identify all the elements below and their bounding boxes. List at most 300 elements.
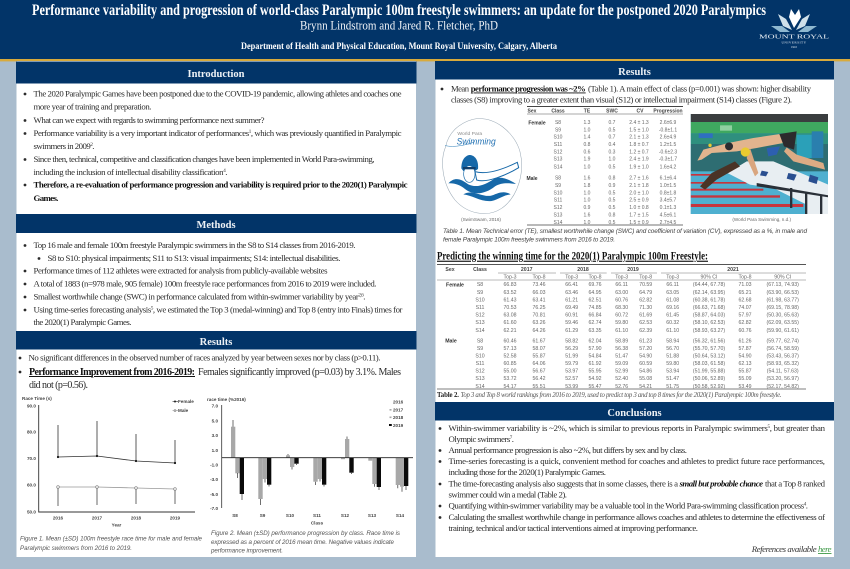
text block: methods bullets: Smallest worthwhile change (SWC) in performance calculated from within-swimmer variability by year — [34, 292, 359, 302]
panel: left column — [16, 61, 416, 557]
table 2: (64.44, 67.78) — [693, 282, 725, 288]
table 2: 61.23 — [639, 339, 652, 345]
table 2: (62.14, 63.95) — [693, 290, 725, 296]
table 2: 60.85 — [504, 361, 517, 367]
text block: results bullets: Performance Improvement from 2016-2019: — [29, 367, 195, 378]
text block: introduction bullets: . — [225, 167, 228, 177]
text block: introduction bullets: Therefore, a re-evaluation of performance progression and variability is required prior to the 2020(1) Paralympic — [34, 180, 408, 190]
table 2: (58.10, 62.53) — [693, 320, 725, 326]
table 2: 61.21 — [565, 298, 578, 304]
table 2: 57.20 — [639, 346, 652, 352]
chart: figure 2 progression bar chart: S9 — [260, 513, 266, 518]
table 2: 62.68 — [739, 298, 752, 304]
table 1: 0.4 — [609, 142, 616, 148]
table 2: 54.17 — [504, 384, 517, 390]
text block: conclusions bullets: 4 — [804, 503, 807, 508]
table 2: 65.21 — [739, 290, 752, 296]
text block: methods bullets: 5 — [151, 306, 154, 312]
table 2: 57.13 — [504, 346, 517, 352]
chart: figure 1 race time line chart — [22, 396, 195, 528]
text block: progression summary: performance progression was ~2% — [471, 84, 586, 94]
table 2: 62.39 — [639, 328, 652, 334]
text block: methods bullets: the 2020(1) Paralympic Games. — [34, 317, 132, 327]
table 2: (54.11, 57.63) — [767, 369, 799, 375]
table 2: 66.83 — [504, 282, 517, 288]
table 1: 1.2±1.5 — [660, 142, 677, 148]
table 2: 53.72 — [504, 376, 517, 382]
chart: figure 1 race time line chart: 50.0 — [27, 510, 36, 514]
table 1: 2.7±4.5 — [660, 220, 677, 226]
table 2: 66.84 — [589, 313, 602, 319]
table 2: S14 — [475, 328, 485, 334]
table 2: 60.32 — [666, 320, 679, 326]
table 2: 52.40 — [615, 376, 628, 382]
table 2: (51.99, 55.88) — [693, 369, 725, 375]
table 2: 62.51 — [589, 298, 602, 304]
table 2: 61.69 — [639, 313, 652, 319]
table 2: 62.74 — [589, 320, 602, 326]
text block: conclusions bullets: . — [512, 434, 514, 444]
table 2: 71.30 — [639, 305, 652, 311]
table 1: S14 — [554, 164, 563, 170]
table 2: 55.51 — [533, 384, 546, 390]
table 2: (53.43, 56.37) — [767, 354, 799, 360]
table 1: S12 — [554, 205, 563, 211]
table 1: 1.0 ± 0.8 — [629, 205, 649, 211]
table 2: (62.09, 63.55) — [767, 320, 799, 326]
table 1: S10 — [554, 135, 563, 141]
table 2: 2017 — [521, 267, 533, 273]
table 2: 55.00 — [504, 369, 517, 375]
chart: figure 2 progression bar chart: -7.0 — [210, 506, 218, 511]
table 2: 52.57 — [565, 376, 578, 382]
text block: conclusions bullets: 5 — [768, 425, 771, 430]
table 2: 62.13 — [739, 361, 752, 367]
table 2: 58.07 — [533, 346, 546, 352]
table 1: Progression — [653, 108, 683, 114]
table 2: 62.53 — [639, 320, 652, 326]
table 1: -0.3±1.7 — [659, 157, 677, 163]
table 1: S11 — [554, 198, 562, 204]
table 1: 0.7 — [609, 120, 616, 126]
text block: introduction bullets: What can we expect with regards to swimming performance next summer? — [34, 115, 265, 125]
table 2: 60.76 — [615, 298, 628, 304]
text block: methods bullets: S8 to S10: physical impairments; S11 to S13: visual impairments; S14: intellectual disabilities. — [48, 253, 340, 263]
heading: Methods: Methods — [196, 220, 236, 231]
table 2: 68.30 — [615, 305, 628, 311]
table 2: 60.46 — [504, 339, 517, 345]
table 2: (67.13, 74.93) — [767, 282, 799, 288]
table 1: 0.9 — [584, 205, 591, 211]
text block: results bullets: No significant differences in the observed number of races analyzed by year between sexes nor by class (p>0.11). — [28, 352, 380, 362]
table 2: Top-3 — [666, 274, 679, 280]
table 2: S11 — [476, 305, 485, 311]
chart: figure 2 progression bar chart: 2016 — [393, 400, 404, 404]
text block: conclusions bullets: Calculating the smallest worthwhile change in performance allows coaches and athletes to determine the effectiveness of — [448, 512, 825, 522]
chart: figure 2 progression bar chart: S14 — [396, 513, 405, 518]
table 1: 4.5±6.1 — [660, 212, 677, 218]
table 2: 56.70 — [666, 346, 679, 352]
table 2: 70.59 — [639, 282, 652, 288]
text block: conclusions bullets: training, technical and/or tactical interventions aimed at improving performance. — [448, 523, 698, 533]
table 2: 64.26 — [533, 328, 546, 334]
table 2: 61.10 — [615, 328, 628, 334]
table 1: 2.6±6.9 — [660, 120, 677, 126]
table 2: 63.08 — [504, 313, 517, 319]
text block: introduction bullets: Games. — [34, 193, 58, 203]
chart: figure 2 progression bar chart: Class — [311, 520, 324, 526]
table 2: 70.81 — [533, 313, 546, 319]
table 2: (59.77, 62.74) — [767, 339, 799, 345]
table 2: 54.92 — [589, 376, 602, 382]
table 2: 55.87 — [739, 369, 752, 375]
table 2: 51.47 — [615, 354, 628, 360]
table 2: Male — [445, 339, 457, 345]
table 1: Male — [526, 176, 538, 182]
table 2: Top-8 — [639, 274, 652, 280]
table 2: 59.79 — [565, 361, 578, 367]
text block: conclusions bullets: swimmer could win a medal (Table 2). — [448, 490, 567, 500]
table 2: (58.93, 65.32) — [767, 361, 799, 367]
table 2: 64.79 — [639, 290, 652, 296]
table 1: Sex — [528, 108, 537, 114]
table 2: (52.17, 54.82) — [767, 384, 799, 390]
table 2: 69.76 — [589, 282, 602, 288]
table 2: 61.10 — [666, 328, 679, 334]
table 2: 54.90 — [739, 354, 752, 360]
table 1: 1.0 — [584, 190, 591, 196]
table 2: 54.84 — [589, 354, 602, 360]
table 2: 61.67 — [533, 339, 546, 345]
table 1: 1.5 ± 0.9 — [629, 220, 649, 226]
text block: progression summary: (Table 1). A main effect of class (p=0.001) was shown: higher disability — [588, 84, 812, 94]
table 2: (60.38, 61.78) — [693, 298, 725, 304]
table 2: 60.59 — [639, 361, 652, 367]
table 2: (55.70, 57.70) — [693, 346, 725, 352]
table 2: 2021 — [727, 267, 739, 273]
text block: introduction bullets: . — [92, 141, 94, 151]
table 2: (50.06, 52.89) — [693, 376, 725, 382]
table 1: 0.3 — [609, 149, 616, 155]
text block: introduction bullets: swimmers in 2009 — [34, 141, 91, 151]
table 2: 54.21 — [639, 384, 652, 390]
text block: progression summary: Mean — [451, 84, 470, 94]
logo: Mount Royal University: 1910 — [791, 45, 798, 49]
table 2: (58.03, 61.58) — [693, 361, 725, 367]
table 1: 2.4 ± 1.9 — [629, 157, 649, 163]
chart: figure 2 progression bar chart: S11 — [313, 513, 321, 518]
table 2: 52.76 — [615, 384, 628, 390]
table 1: S9 — [555, 183, 561, 189]
table 2: 55.87 — [533, 354, 546, 360]
chart: figure 1 race time line chart: 2016 — [53, 516, 64, 520]
image: swimmers diving from starting blocks — [691, 114, 828, 222]
table 2: 58.94 — [666, 339, 679, 345]
table 2: 57.87 — [739, 346, 752, 352]
table 1: CV — [637, 108, 644, 114]
table 1: 3.4±5.7 — [660, 198, 677, 204]
caption: figure 2 — [210, 530, 400, 554]
table 2: 63.26 — [533, 320, 546, 326]
table 2: (50.30, 65.63) — [767, 313, 799, 319]
text block: introduction bullets: including the inclusion of intellectual disability classification — [34, 167, 224, 177]
table 2: 51.75 — [666, 384, 679, 390]
text block: conclusions bullets: Within-swimmer variability is ~2%, which is similar to previous reports in Paralympic swimmers — [448, 423, 768, 433]
table 1: 1.9 — [584, 157, 591, 163]
table 2: 56.29 — [565, 346, 578, 352]
table 2: 61.92 — [589, 361, 602, 367]
text block: methods bullets: Top 16 male and female 100m freestyle Paralympic swimmers in the S8 to S14 classes from 2016-2019. — [34, 240, 356, 250]
table 2 — [437, 264, 806, 390]
table 2: 74.85 — [589, 305, 602, 311]
table 2: 60.91 — [565, 313, 578, 319]
table 2: 61.29 — [565, 328, 578, 334]
caption: figure 1: Figure 1. Mean (±SD) 100m freestyle race time for male and female — [20, 536, 203, 542]
table 1: 2.0 ± 1.0 — [629, 190, 649, 196]
chart: figure 2 progression bar chart: 2018 — [393, 415, 404, 420]
logo: Mount Royal University — [759, 9, 829, 49]
table 2: 55.47 — [589, 384, 602, 390]
chart: figure 1 race time line chart: 2017 — [92, 516, 103, 520]
table 1: 1.0±1.5 — [660, 183, 677, 189]
table 2: 61.08 — [666, 298, 679, 304]
table 2: 63.00 — [615, 290, 628, 296]
table 1: S14 — [554, 220, 563, 226]
text block: progression summary: classes (S8) improving to a greater extent than visual (S12) or intellectual impairment (S14) classes (Figure 2). — [451, 94, 792, 104]
chart: figure 2 progression bar chart: 2019 — [393, 423, 404, 428]
table 2: 53.99 — [565, 384, 578, 390]
table 2: (61.98, 63.77) — [767, 298, 799, 304]
table 2: 61.60 — [504, 320, 517, 326]
table 2: 60.72 — [615, 313, 628, 319]
table 2: 55.09 — [739, 376, 752, 382]
caption: table 2: Table 2. — [437, 392, 459, 399]
table 1: S8 — [555, 176, 561, 182]
text block: methods bullets: . — [363, 292, 365, 302]
table 2: 52.99 — [615, 369, 628, 375]
table 2: 66.11 — [666, 282, 679, 288]
caption: figure 2: performance improvement. — [210, 548, 283, 554]
table 2: 60.76 — [739, 328, 752, 334]
table 2: S8 — [477, 339, 483, 345]
text block: methods bullets: Performance times of 112 athletes were extracted for analysis from publicly-available websites — [34, 266, 328, 276]
table 1: 1.0 — [584, 198, 591, 204]
table 1: TE — [584, 108, 591, 114]
table 1: Class — [551, 108, 565, 114]
chart: figure 2 progression bar chart: S10 — [286, 513, 295, 518]
table 1: 0.5 — [609, 127, 616, 133]
table 2: S10 — [475, 354, 485, 360]
table 1: 1.3 — [584, 120, 591, 126]
table 1: 1.0 — [609, 157, 616, 163]
table 2: S8 — [477, 282, 483, 288]
text block: introduction bullets: Performance variability is a very important indicator of performances — [34, 128, 249, 138]
caption: table 1 — [443, 228, 807, 244]
table 1: S12 — [554, 149, 563, 155]
table 2: Sex — [445, 267, 455, 273]
authors: Brynn Lindstrom and Jared R. Fletcher, PhD — [300, 18, 498, 32]
table 1: 0.7 — [609, 135, 616, 141]
table 1: -0.8±1.1 — [659, 127, 677, 133]
heading: Results (right): Results — [618, 67, 651, 78]
chart: figure 2 progression bar chart: -3.0 — [210, 477, 218, 482]
table 2: (69.15, 78.98) — [767, 305, 799, 311]
chart: figure 2 progression bar chart: 1.0 — [212, 448, 218, 453]
text block: conclusions bullets: , but greater than — [770, 423, 826, 433]
table 2: Female — [446, 282, 464, 288]
table 1: 1.6 — [584, 176, 591, 182]
table 2: 63.35 — [589, 328, 602, 334]
affiliation: Department of Health and Physical Education, Mount Royal University, Calgary, Alberta — [241, 42, 557, 52]
text block: introduction bullets: 2 — [90, 143, 93, 148]
table 1: 0.5 — [609, 190, 616, 196]
table 2: Top-8 — [739, 274, 752, 280]
table 2: 53.49 — [739, 384, 752, 390]
text block: results bullets: Females significantly improved (p=0.03) by 3.1%. Males — [198, 367, 401, 378]
table 2: 70.53 — [504, 305, 517, 311]
chart: figure 2 progression bar chart: race time (%2016) — [207, 397, 246, 402]
table 2: 66.11 — [615, 282, 628, 288]
table 1: 2.1 ± 1.3 — [629, 135, 649, 141]
table 2: Top-3 — [565, 274, 578, 280]
table 2: 57.97 — [739, 313, 752, 319]
heading: predicting the winning time: Predicting the winning time for the 2020(1) Paralympic 100m Freestyle: — [437, 251, 708, 263]
caption: figure 2: expressed as a percent of 2016 mean time. Negative values indicate — [211, 539, 395, 546]
table 2: S12 — [475, 313, 485, 319]
table 1: 2.6±4.9 — [660, 135, 677, 141]
table 1: 0.8 — [584, 142, 591, 148]
table 2: S10 — [475, 298, 485, 304]
table 1: 2.1 ± 1.8 — [629, 183, 649, 189]
heading: Results (left): Results — [200, 337, 232, 348]
table 1: 1.0 — [584, 164, 591, 170]
table 2: 61.43 — [504, 298, 517, 304]
text block: conclusions bullets: Annual performance progression is also ~2%, but differs by sex and by class. — [448, 445, 687, 455]
table 2: 51.99 — [565, 354, 578, 360]
table 2: (66.63, 71.68) — [693, 305, 725, 311]
text block: conclusions bullets: including those for the 2020(1) Paralympic Games. — [448, 467, 606, 477]
table 1: S13 — [554, 212, 563, 218]
caption: figure 1 — [20, 536, 203, 552]
table 2: 63.05 — [666, 290, 679, 296]
table 1: 0.5 — [609, 220, 616, 226]
image credit: World Para Swimming: (World Para Swimming, n.d.) — [732, 217, 791, 222]
text block: conclusions bullets: The time-forecasting analysis also suggests that in some classes, there is a — [448, 479, 678, 489]
text block: methods bullets — [24, 240, 403, 327]
table 2: 62.82 — [739, 320, 752, 326]
chart: figure 2 progression bar chart: S8 — [232, 513, 238, 518]
caption: table 1: female Paralympic 100m freestyle swimmers from 2016 to 2019. — [443, 237, 615, 244]
text block: conclusions bullets: Time-series forecasting is a quick, convenient method for coaches and athletes to predict future race performances, — [448, 456, 825, 466]
table 2: (59.90, 61.61) — [767, 328, 799, 334]
table 2: 2018 — [577, 267, 589, 273]
table 2: Class — [473, 267, 487, 273]
heading: Results (left) — [16, 331, 416, 350]
table 1: 1.8 ± 0.7 — [629, 142, 649, 148]
chart: figure 2 progression bar chart: -5.0 — [210, 492, 218, 497]
text block: conclusions bullets: that a Top 8 ranked — [765, 479, 826, 489]
chart: figure 1 race time line chart: 80.0 — [27, 430, 36, 434]
table 2: 51.47 — [666, 376, 679, 382]
chart: figure 2 progression bar chart: 7.0 — [212, 404, 218, 408]
table 2: 69.16 — [666, 305, 679, 311]
table 2: (63.90, 66.53) — [767, 290, 799, 296]
icon: World Para Swimming logo: Swimming — [457, 137, 496, 147]
header banner — [0, 0, 850, 61]
heading: Results (right) — [435, 61, 834, 80]
image credit: SwimSwam: (SwimSwam, 2016) — [461, 217, 501, 222]
table 2: S12 — [475, 369, 485, 375]
table 2: (56.74, 58.59) — [767, 346, 799, 352]
table 1 — [526, 106, 683, 226]
table 2: (53.20, 56.97) — [767, 376, 799, 382]
table 1: 2.4 ± 1.3 — [629, 120, 649, 126]
chart: figure 2 progression bar chart — [207, 397, 413, 526]
table 2: 62.82 — [639, 298, 652, 304]
table 2: 56.38 — [615, 346, 628, 352]
table 2: S9 — [477, 346, 483, 352]
table 1: 1.0 — [584, 220, 591, 226]
table 1: Female — [528, 120, 546, 126]
text block: introduction bullets — [24, 88, 408, 203]
table 2: 66.03 — [533, 290, 546, 296]
logo: Mount Royal University: MOUNT ROYAL — [759, 34, 829, 40]
table 2: S14 — [475, 384, 485, 390]
table 2: 63.52 — [504, 290, 517, 296]
text block: progression summary — [441, 84, 812, 104]
chart: figure 1 race time line chart: Female — [178, 399, 194, 404]
table 1: 1.8 — [584, 183, 591, 189]
table 2: 59.46 — [565, 320, 578, 326]
text block: conclusions bullets: . — [806, 501, 808, 511]
heading: Methods — [16, 214, 416, 233]
table 2: 55.08 — [639, 376, 652, 382]
table 1: 1.4 — [584, 135, 591, 141]
table 2: 59.80 — [615, 320, 628, 326]
caption: table 1: Table 1. Mean Technical error (TE), smallest worthwhile change (SWC) and coefficient of variation (CV), expressed as a %, in male and — [443, 228, 807, 235]
caption: figure 2: Figure 2. Mean (±SD) performance progression by class. Race time is — [211, 530, 400, 537]
table 2: Top-8 — [589, 274, 602, 280]
heading: Conclusions — [435, 402, 834, 420]
table 2: 74.07 — [739, 305, 752, 311]
table 2: 61.26 — [739, 339, 752, 345]
chart: figure 2 progression bar chart: -1.0 — [210, 462, 218, 468]
table 2: 61.45 — [666, 313, 679, 319]
chart: figure 1 race time line chart: 90.0 — [27, 404, 36, 408]
text block: conclusions bullets: small but probable chance — [678, 479, 763, 489]
chart: figure 2 progression bar chart: S12 — [341, 513, 350, 518]
chart: figure 2 progression bar chart: 5.0 — [212, 418, 218, 424]
text block: introduction bullets: Since then, technical, competitive and classification changes have been implemented in World Para-swimming, — [34, 154, 374, 164]
icon: World Para Swimming logo: World Para — [457, 131, 482, 137]
table 2: S9 — [477, 290, 483, 296]
heading: Conclusions: Conclusions — [607, 408, 662, 419]
table 2: 51.88 — [666, 354, 679, 360]
references link: here — [818, 544, 832, 554]
text block: introduction bullets: more year of training and preparation. — [34, 102, 152, 112]
table 1: 0.1±1.3 — [660, 205, 677, 211]
table 1: S9 — [555, 127, 561, 133]
table 2: 90% CI — [700, 274, 718, 280]
table 2: 66.41 — [565, 282, 578, 288]
text block: introduction bullets: 4 — [223, 169, 226, 174]
table 2: 54.86 — [639, 369, 652, 375]
table 2: 62.04 — [589, 339, 602, 345]
chart: figure 2 progression bar chart: 3.0 — [212, 433, 218, 438]
text block: methods bullets: 2,6 — [358, 294, 364, 298]
table 2: 71.03 — [739, 282, 752, 288]
caption: figure 1: Paralympic swimmers from 2016 to 2019. — [20, 545, 132, 552]
